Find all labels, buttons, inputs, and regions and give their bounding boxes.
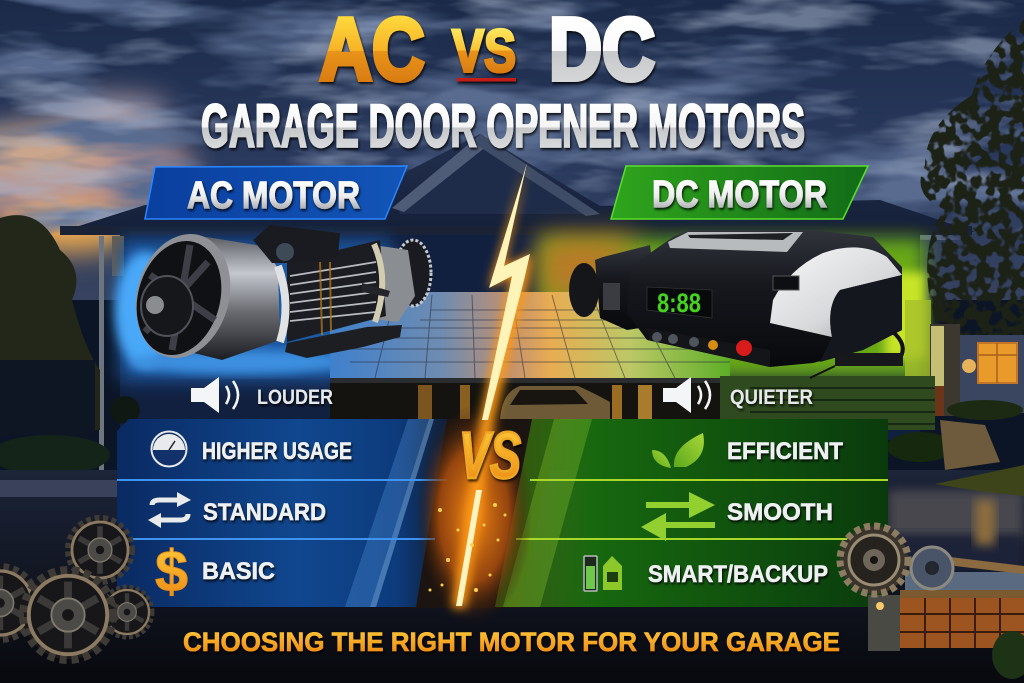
row text: smooth: SMOOTH (727, 499, 833, 526)
small lit garage (868, 557, 1024, 679)
sound label: quieter (663, 377, 813, 413)
row text: smart/backup: SMART/BACKUP (648, 561, 828, 588)
row text: higher usage: HIGHER USAGE (202, 438, 352, 465)
trees: left canopy (0, 215, 140, 475)
gears: bottom left (0, 518, 152, 659)
centre fire band (390, 419, 560, 608)
icon: phone and battery (584, 556, 622, 591)
title: AC vs DC: AC (320, 0, 424, 98)
title: AC vs DC (320, 0, 655, 98)
badge: DC motor: DC MOTOR (652, 174, 827, 216)
right-side wing: stone wall, window, lantern (720, 300, 1024, 462)
comparison panel: AC (117, 419, 447, 607)
house (60, 134, 975, 472)
lightning bolt with sparks (416, 163, 532, 625)
icon: leaf (652, 433, 704, 468)
sound label: louder: LOUDER (257, 386, 333, 409)
footer tagline: CHOOSING THE RIGHT MOTOR FOR YOUR GARAGE (183, 627, 840, 657)
row text: standard: STANDARD (203, 499, 326, 526)
row text: basic: BASIC (202, 558, 275, 585)
badge: DC motor (611, 166, 868, 219)
badge: AC motor (145, 166, 407, 219)
sound label: louder (191, 377, 333, 413)
background: dusk sky (0, 0, 1024, 300)
icon: dollar: $ (155, 539, 188, 604)
sound label: quieter: QUIETER (730, 386, 813, 409)
garage door (330, 292, 730, 420)
title: AC vs DC: DC (549, 0, 655, 98)
icon: gauge (152, 432, 186, 466)
glow behind motors (115, 236, 925, 380)
DC motor illustration: 8:88 (657, 288, 701, 318)
title: AC vs DC: VS (452, 18, 516, 84)
gears: bottom right (840, 526, 953, 594)
trees: right canopy (920, 20, 1024, 335)
icon: double arrows (641, 492, 715, 541)
badge: AC motor: AC MOTOR (187, 175, 360, 217)
AC motor illustration (122, 223, 431, 369)
icon: exchange arrows (148, 492, 191, 528)
comparison panel: DC (495, 419, 888, 607)
VS emblem: VS (459, 418, 521, 492)
ground: driveway (0, 420, 1024, 683)
row text: efficient: EFFICIENT (727, 438, 843, 465)
DC motor illustration (569, 230, 903, 378)
